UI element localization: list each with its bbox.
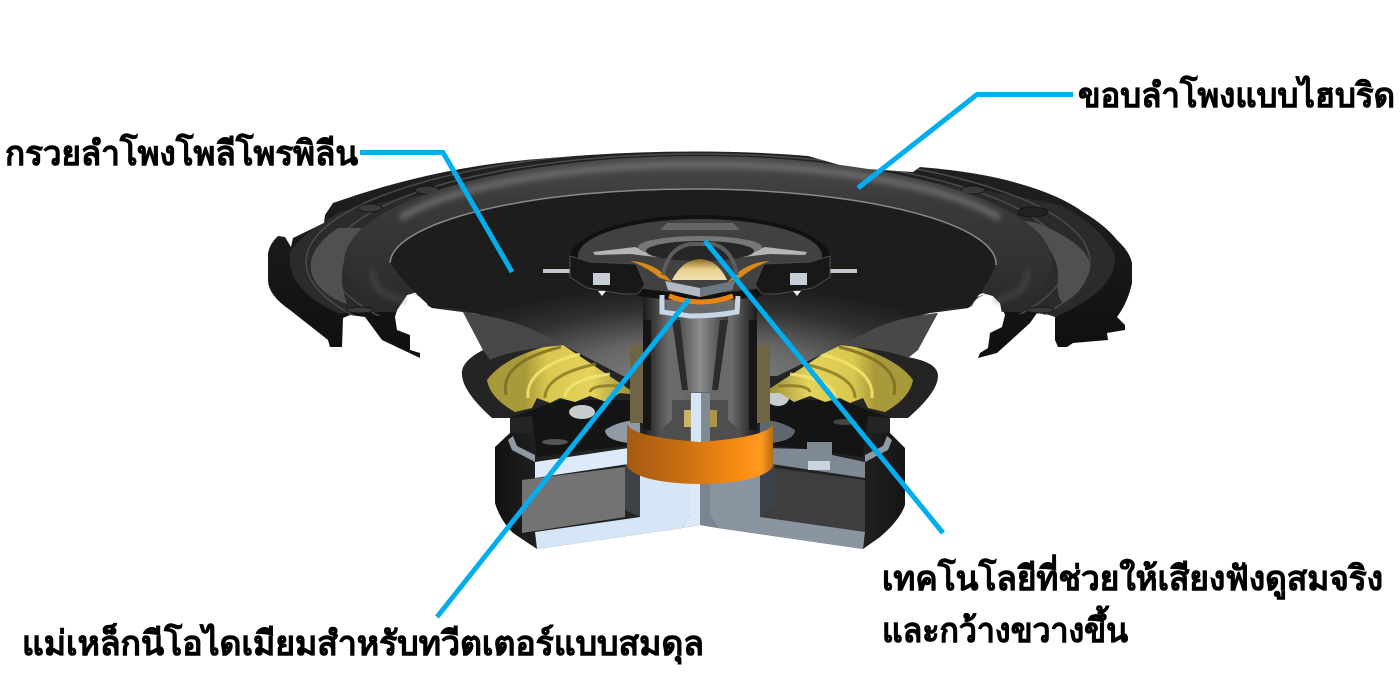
surround highlight: [400, 164, 1000, 218]
hybrid surround ring: [344, 156, 1052, 312]
surround side shading right: [995, 270, 1028, 300]
magnet and lower frame: [462, 312, 938, 549]
voice coil base right: [710, 400, 740, 442]
orange diaphragm wings: [630, 261, 672, 282]
outer magnet body: [495, 433, 905, 549]
left top plate: [535, 447, 635, 478]
right coil former: [755, 345, 770, 423]
flange screw holes: [346, 186, 1054, 313]
frame interior right: [760, 400, 890, 457]
left bridge arm: [593, 247, 665, 258]
neodymium magnet ring: [669, 296, 733, 302]
cone: [390, 189, 996, 376]
magnet bracket: [662, 295, 738, 316]
right grey crescent: [1020, 220, 1090, 303]
pole column: [643, 295, 757, 442]
tweeter: [543, 215, 857, 316]
left spider rings: [505, 347, 622, 398]
flange contour lines: [305, 153, 1091, 316]
bell spoke tops: [463, 312, 565, 360]
left magnet section: [522, 467, 625, 533]
right spider rings: [778, 347, 895, 398]
right magnet section: [760, 468, 865, 533]
left grey crescent: [311, 228, 362, 304]
cone cutout lip: [412, 294, 432, 308]
housing top cap: [660, 223, 740, 230]
voice coil and pole assembly: [627, 295, 773, 484]
center seam right: [700, 480, 718, 528]
ring base right: [865, 436, 892, 462]
core side dark: [672, 320, 688, 390]
speaker basket frame: [268, 150, 1132, 374]
right terminal: [827, 269, 857, 273]
flange inner shelf: [290, 183, 1115, 317]
neodymium magnet top: [665, 281, 735, 297]
ring base left: [508, 436, 535, 462]
right plate rivet: [808, 461, 830, 470]
spider: [487, 343, 913, 412]
pole side shadows: [643, 320, 651, 430]
left yellow spider: [487, 343, 638, 412]
frame bell: [462, 312, 938, 433]
outer flange silhouette: [268, 151, 1132, 358]
right yellow spider: [763, 343, 913, 412]
speaker cutaway illustration: [268, 150, 1132, 549]
label: sound technology: [882, 554, 1383, 650]
rivets: [569, 405, 595, 419]
frame interior left: [510, 400, 640, 457]
label: sound technology: และกว้างขวางขึ้น: [882, 605, 1128, 650]
surround side shading left: [372, 270, 405, 300]
center stem: [691, 393, 701, 443]
gold contacts: [684, 410, 691, 427]
callout line: polypropylene cone: [360, 152, 512, 272]
callout line: sound technology: [705, 241, 943, 533]
polypropylene cone: [390, 189, 996, 376]
magnet gap left: [625, 462, 640, 517]
inner cone core: [672, 317, 728, 392]
tweeter dome: [672, 259, 727, 280]
orange ring band: [627, 424, 773, 484]
left terminal: [543, 269, 573, 273]
right top plate: [765, 442, 865, 478]
right leg: [755, 256, 830, 294]
label: hybrid surround: ขอบลำโพงแบบไฮบริด: [1078, 75, 1395, 115]
callout line: neodymium magnet: [437, 299, 689, 617]
label: polypropylene cone: กรวยลำโพงโพลีโพรพิลีน: [5, 133, 358, 173]
tweeter centre ring: [638, 236, 762, 258]
cone rim highlight: [390, 189, 996, 265]
surround: [344, 156, 1052, 312]
left coil former: [630, 345, 645, 423]
leg details: [593, 273, 610, 285]
center seam left: [682, 480, 700, 528]
label: neodymium magnet: แม่เหล็กนีโอไดเมียมสำหรับทวีตเตอร์แบบสมดุล: [22, 622, 704, 665]
voice coil base left: [660, 400, 690, 442]
pole plate rims: [605, 420, 640, 450]
callout line: hybrid surround: [858, 94, 1073, 188]
tweeter housing ring: [570, 215, 830, 301]
left leg: [570, 256, 645, 294]
magnet gap right: [760, 462, 775, 517]
left bottom plate: [535, 472, 690, 549]
tweeter inner face: [578, 219, 822, 293]
right bridge arm: [735, 247, 807, 258]
tweeter arch: [663, 244, 737, 275]
right bottom plate: [710, 472, 865, 549]
label: sound technology: เทคโนโลยีที่ช่วยให้เสียงฟังดูสมจริง: [882, 554, 1383, 600]
